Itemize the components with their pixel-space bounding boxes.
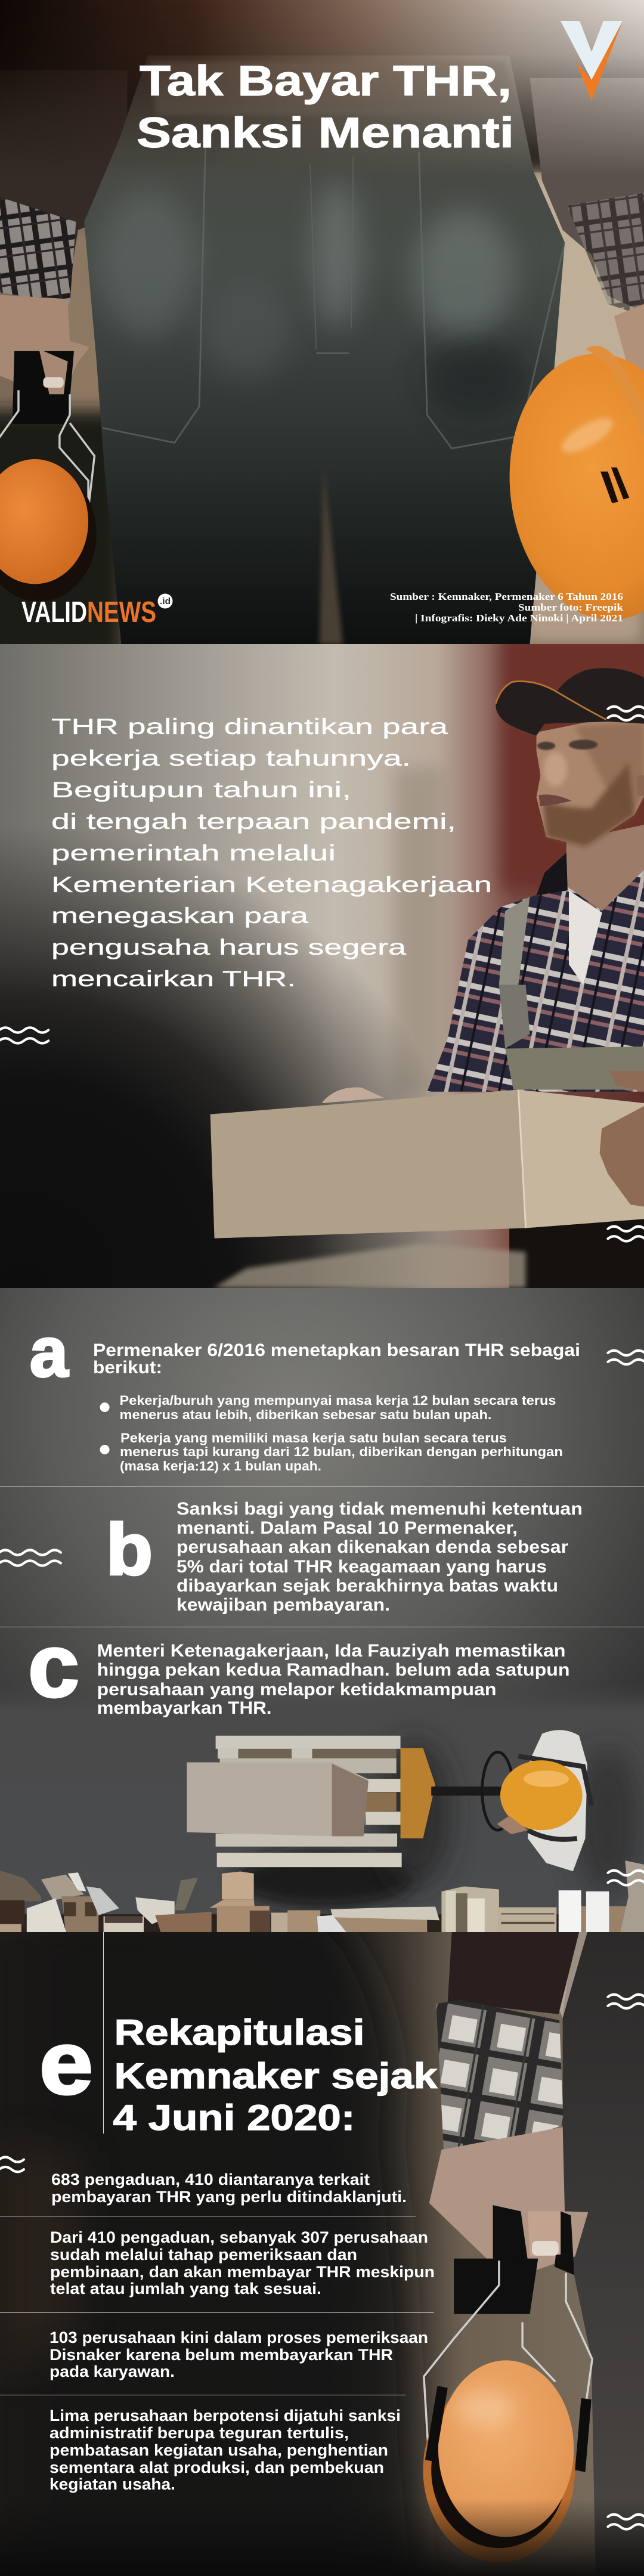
recap item 1: 683 pengaduan, 410 diantaranya terkait [51,2171,370,2188]
panel: hero photo and title [0,0,644,677]
recap item 4: sementara alat produksi, dan pembekuan [49,2459,384,2476]
bullet list: (masa kerja:12) x 1 bulan upah. [120,1459,321,1473]
heading: Rekapitulasi [114,2012,365,2052]
section a text: berikut: [93,1358,162,1377]
recap item 4: Lima perusahaan berpotensi dijatuhi sanksi [49,2407,401,2425]
recap item 1 [51,2171,407,2206]
pallet truck [401,1748,435,1838]
intro paragraph: di tengah terpaan pandemi, [51,809,456,834]
source credits: Sumber foto: Freepik [518,602,624,613]
letter a: a [30,1313,69,1392]
section b text: kewajiban pembayaran. [177,1595,390,1615]
intro paragraph [51,714,492,991]
logo: Validnews.id: NEWS [87,596,156,628]
logo: Validnews.id: .id [160,596,171,606]
face [537,718,644,847]
bullet list: menerus tapi kurang dari 12 bulan, diberikan dengan perhitungan [120,1444,563,1459]
intro paragraph: Begitupun tahun ini, [51,778,351,802]
section b text: Sanksi bagi yang tidak memenuhi ketentuan [177,1499,583,1519]
worker from above [497,1730,592,1871]
logo: Validnews.id: VALID [21,596,87,628]
photo: worker with cardboard box [0,627,644,1288]
intro paragraph: mencairkan THR. [51,967,296,991]
letter c: c [28,1615,79,1716]
intro paragraph: pengusaha harus segera [51,935,407,959]
recap item 4: pembatasan kegiatan usaha, penghentian [49,2441,388,2459]
hands [600,1071,644,1207]
intro paragraph: pekerja setiap tahunnya. [51,746,411,770]
box [210,1089,644,1239]
panel: intro with worker carrying box [0,627,644,1288]
source credits: | Infografis: Dieky Ade Ninoki | April 2021 [415,612,623,624]
recap item 3 [49,2329,428,2380]
section b text: menanti. Dalam Pasal 10 Permenaker, [177,1518,518,1538]
panel: Kemnaker recap [0,1912,644,2576]
section c text: membayarkan THR. [97,1698,271,1718]
letter e: e [39,2012,93,2113]
hard hat [509,346,644,620]
section c text [97,1641,570,1718]
recap item 3: pada karyawan. [49,2363,175,2380]
section c text: Menteri Ketenagakerjaan, Ida Fauziyah memastikan [97,1641,565,1661]
recap item 2 [50,2228,435,2298]
section b text: 5% dari total THR keagamaan yang harus [177,1557,547,1577]
recap item 2: telat atau jumlah yang tak sesuai. [50,2280,321,2298]
sleeves [0,70,128,260]
recap item 4: administratif berupa teguran tertulis, [49,2424,349,2442]
recap item 4: kegiatan usaha. [49,2475,175,2493]
pallet [187,1736,402,1867]
section a [30,1313,580,1473]
section c [28,1615,570,1718]
section a text: Permenaker 6/2016 menetapkan besaran THR sebagai [93,1340,580,1360]
rubble of cartons [0,1860,644,1933]
intro paragraph: Kementerian Ketenagakerjaan [51,872,492,897]
section b text [177,1499,583,1615]
section b text: perusahaan akan dikenakan denda sebesar [177,1537,568,1557]
title [137,58,514,157]
recap item 2: Dari 410 pengaduan, sebanyak 307 perusahaan [50,2228,428,2246]
title: Sanksi Menanti [137,110,514,157]
bullet list [100,1393,563,1473]
worker torso [427,870,644,1092]
section c text: perusahaan yang melapor ketidakmampuan [97,1680,496,1699]
section a text [93,1340,580,1377]
title: Tak Bayar THR, [140,58,512,105]
intro paragraph: THR paling dinantikan para [51,714,448,739]
intro paragraph: pemerintah melalui [51,841,336,865]
hand right [614,304,644,371]
bullet list: Pekerja/buruh yang mempunyai masa kerja 12 bulan secara terus [119,1393,556,1408]
recap item 2: sudah melalui tahap pemeriksaan dan [50,2246,357,2264]
trousers [84,55,565,644]
vertical divider [103,1932,104,2134]
recap item 4 [49,2407,401,2493]
background and warehouse photo [0,1288,644,1933]
recap item 3: Disnaker karena belum membayarkan THR [49,2346,393,2364]
neck [566,825,644,911]
ear muffs [0,349,97,602]
section c text: hingga pekan kedua Ramadhan. belum ada satupun [97,1660,570,1680]
hand left [0,295,89,382]
section b text: dibayarkan sejak berakhirnya batas waktu [177,1576,558,1596]
dark lower body [509,1219,644,1288]
panel: rules and sanctions [0,1288,644,1933]
letter b: b [106,1509,153,1590]
logo: V mark [561,21,623,101]
boxes below [213,1244,526,1288]
decorative wave marks [0,707,644,2529]
section b [106,1499,583,1615]
recap item 1: pembayaran THR yang perlu ditindaklanjuti. [51,2188,407,2206]
waistband fade [0,0,644,177]
heading: 4 Juni 2020: [113,2098,355,2138]
bullet list: menerus atau lebih, diberikan sebesar satu bulan upah. [119,1407,491,1422]
recap item 2: pembinaan, dan akan membayar THR meskipun [50,2263,435,2281]
cap [496,668,644,736]
photo: hand holding ear muffs [0,1912,644,2576]
source credits: Sumber : Kemnaker, Permenaker 6 Tahun 2016 [390,591,623,602]
recap item 3: 103 perusahaan kini dalam proses pemeriksaan [49,2329,428,2346]
bullet list: Pekerja yang memiliki masa kerja satu bulan secara terus [120,1431,507,1445]
source credits [390,591,624,624]
intro paragraph: menegaskan para [51,903,309,928]
photo: worker in grey work trousers [0,0,644,677]
heading: Kemnaker sejak [114,2056,438,2096]
heading [113,2012,438,2138]
logo: Validnews.id [21,594,173,628]
